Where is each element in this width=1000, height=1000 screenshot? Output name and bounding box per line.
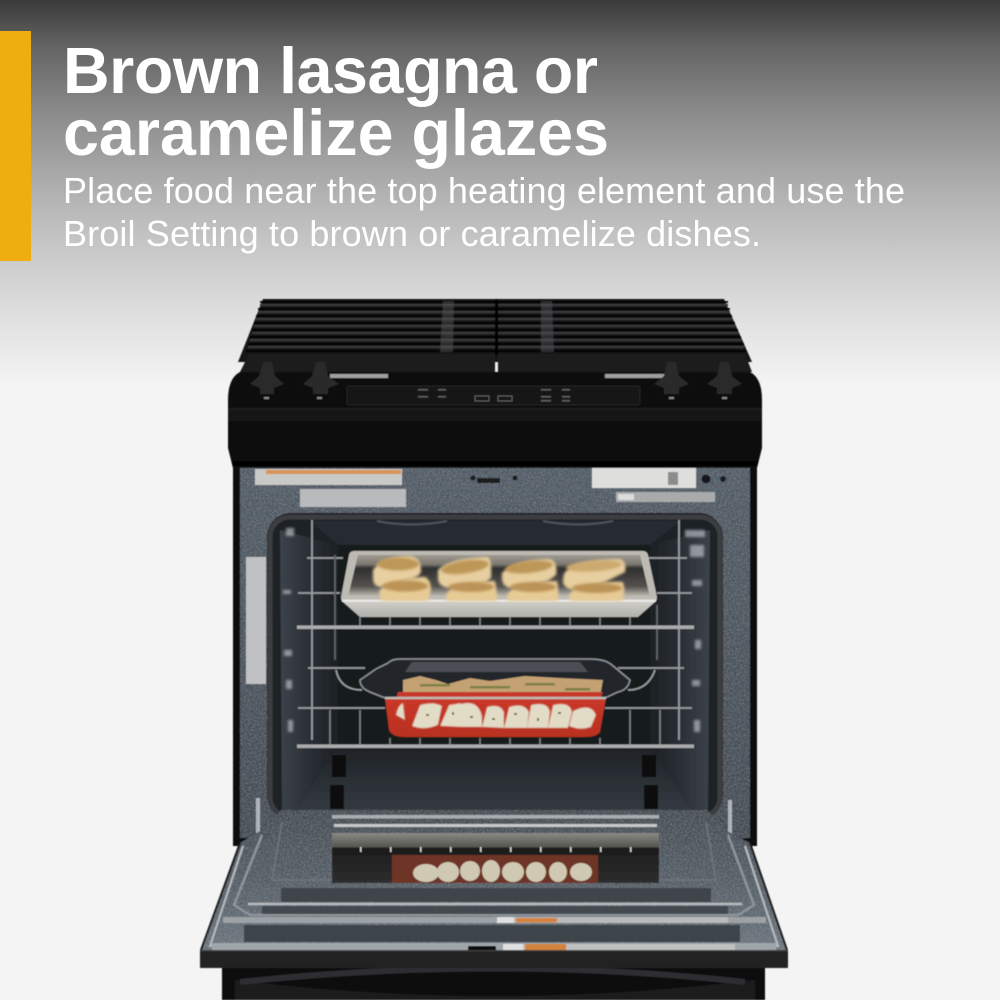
title: caramelize glazes — [63, 97, 609, 169]
upper oven rack — [297, 520, 694, 740]
accent bar — [0, 31, 31, 261]
cooktop body and control panel — [228, 372, 762, 410]
title: Brown lasagna or — [63, 35, 598, 107]
door bar and lower drawer — [200, 950, 788, 1000]
cooktop grates — [238, 299, 752, 372]
oven range illustration — [200, 299, 788, 1000]
fascia — [228, 408, 762, 468]
subtitle text: Broil Setting to brown or caramelize dishes. — [63, 213, 761, 254]
control knobs — [250, 362, 742, 399]
door hinges — [256, 798, 732, 835]
door window with reflection — [332, 833, 659, 883]
glass lasagna dish — [360, 659, 630, 737]
door warning labels — [468, 917, 735, 950]
stickers on oven face — [246, 468, 726, 684]
subtitle text — [63, 170, 905, 254]
subtitle text: Place food near the top heating element and use the — [63, 170, 905, 211]
title — [63, 35, 609, 169]
oven frame and speckled face — [233, 466, 757, 846]
open oven door — [200, 810, 787, 950]
oven cavity — [267, 513, 723, 818]
baking pan — [341, 551, 657, 617]
lower oven rack — [297, 668, 694, 748]
toasted bread slices — [373, 556, 625, 601]
